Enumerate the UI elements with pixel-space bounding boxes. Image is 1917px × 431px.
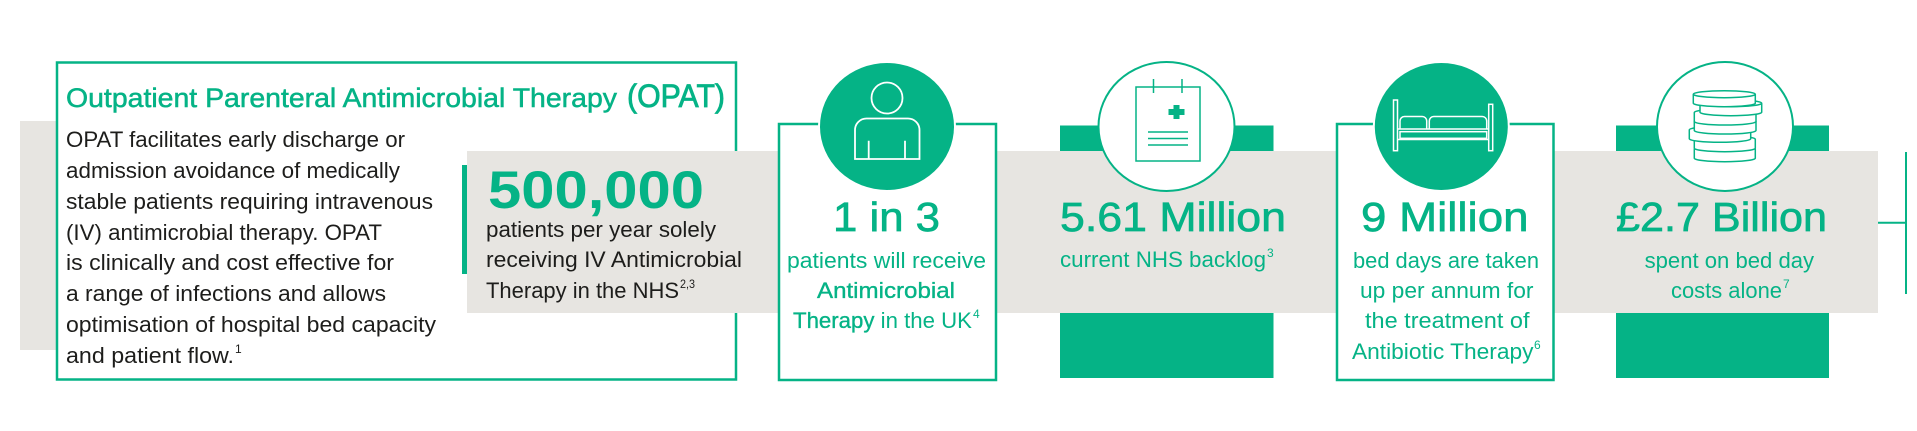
statistic: 500,000: Therapy in the NHS — [486, 278, 679, 303]
body text: is clinically and cost effective for — [66, 250, 394, 275]
stat text: 4 — [973, 307, 980, 321]
icon: clipboard — [1098, 62, 1234, 191]
body text: and patient flow. — [66, 343, 234, 368]
statistic: 500,000: receiving IV Antimicrobial — [486, 247, 742, 272]
stat text: costs alone — [1671, 278, 1782, 303]
title: (OPAT) — [627, 78, 725, 114]
stat text: bed days are taken — [1353, 248, 1539, 273]
body text: (IV) antimicrobial therapy. OPAT — [66, 220, 382, 245]
body text — [66, 127, 436, 368]
card: 2.7 Billion — [1616, 62, 1829, 378]
statistic: 500,000: 2,3 — [680, 277, 695, 291]
stat text: patients will receive — [787, 248, 986, 273]
stat text: Antibiotic Therapy — [1352, 339, 1534, 364]
stat text: 7 — [1783, 277, 1790, 291]
body text: admission avoidance of medically — [66, 158, 400, 183]
card: 5.61 Million — [1060, 62, 1286, 378]
stat text — [1352, 194, 1541, 364]
stat text: £2.7 Billion — [1616, 194, 1827, 240]
title: Outpatient Parenteral Antimicrobial Therapy — [66, 83, 618, 113]
statistic: 500,000: patients per year solely — [486, 217, 716, 242]
card: 1 in 3 — [779, 61, 996, 380]
left grey block — [20, 121, 58, 350]
card: 9 Million — [1337, 61, 1554, 380]
body text: a range of infections and allows — [66, 281, 386, 306]
stat text: spent on bed day — [1645, 248, 1814, 273]
body text: stable patients requiring intravenous — [66, 189, 433, 214]
panel: OPAT description — [57, 62, 736, 380]
icon: coins — [1657, 62, 1793, 191]
body text: optimisation of hospital bed capacity — [66, 312, 436, 337]
grey band — [467, 151, 1878, 313]
title — [66, 78, 725, 114]
body text: OPAT facilitates early discharge or — [66, 127, 405, 152]
icon: bed — [1373, 61, 1510, 192]
stat text: 9 Million — [1361, 194, 1528, 240]
stat text — [1616, 194, 1827, 303]
stat text: 1 in 3 — [833, 194, 940, 240]
accent bar — [462, 165, 467, 274]
stat text: 3 — [1267, 246, 1274, 260]
stat text — [787, 194, 986, 333]
connector arrow — [1878, 152, 1906, 294]
stat text: Antimicrobial — [817, 278, 955, 303]
body text: 1 — [235, 342, 242, 356]
stat text: up per annum for — [1360, 278, 1534, 303]
stat text: 6 — [1534, 338, 1541, 352]
icon: person — [818, 61, 956, 192]
statistic: 500,000: 500,000 — [488, 161, 704, 220]
stat text — [1060, 194, 1286, 272]
stat text: current NHS backlog — [1060, 247, 1266, 272]
stat text: the treatment of — [1365, 308, 1530, 333]
stat text: 5.61 Million — [1060, 194, 1286, 240]
statistic: 500,000 — [486, 161, 742, 303]
stat text: Therapy in the UK — [793, 308, 972, 333]
